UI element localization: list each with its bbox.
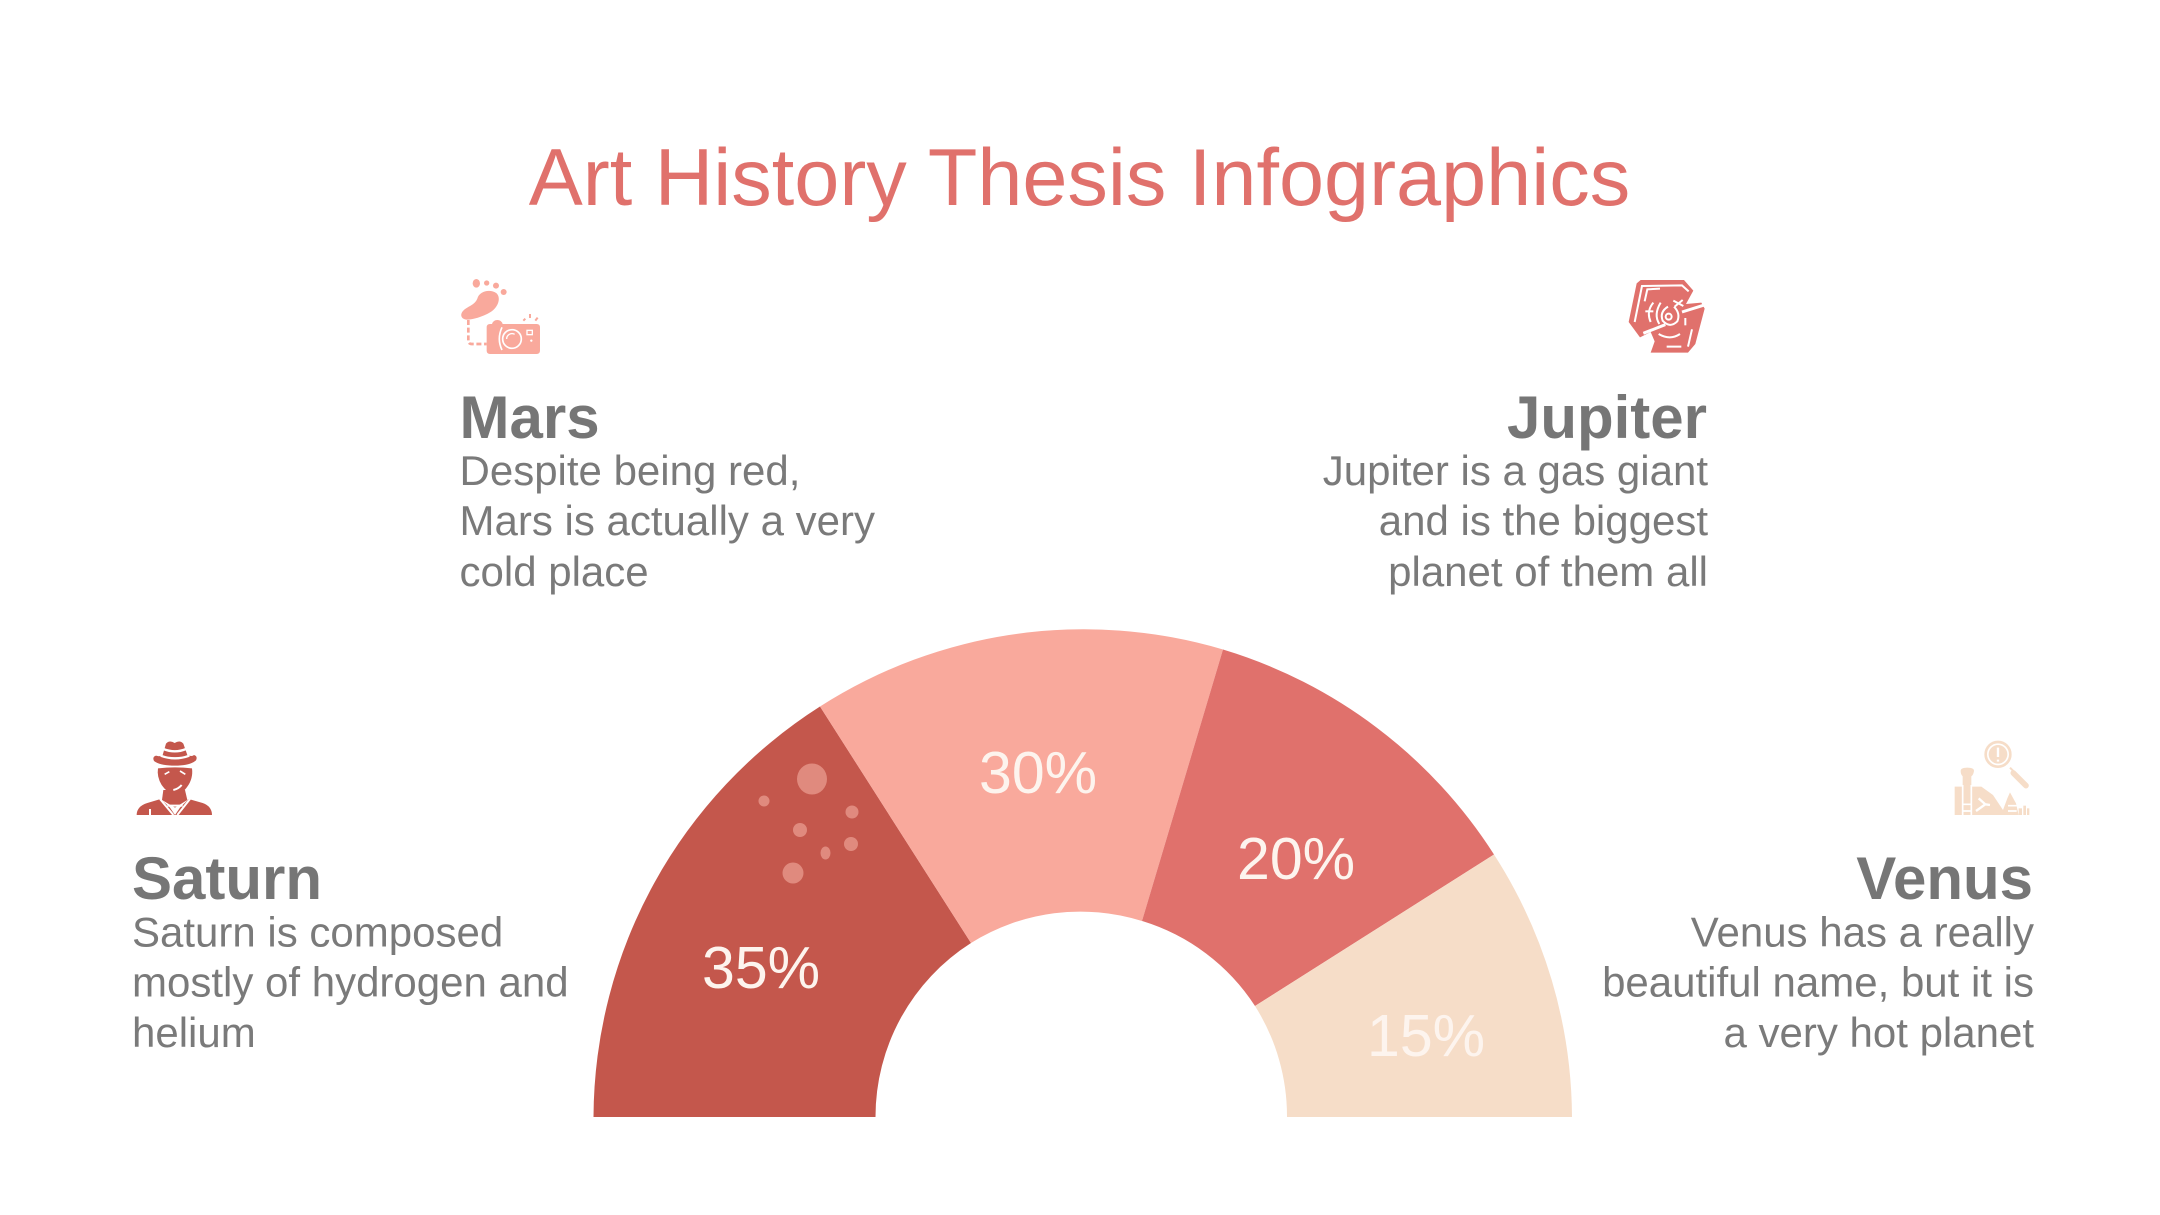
icon: magnifier and ruins	[1955, 742, 2029, 815]
text: Jupiter description: Jupiter is a gas giant	[1323, 447, 1708, 494]
segment: Venus 15%	[1255, 854, 1572, 1117]
text: Venus description: Venus has a really	[1691, 908, 2034, 956]
value: 35%: 35%	[702, 935, 820, 1001]
text: Mars description: Mars is actually a very	[460, 497, 875, 544]
segment: Jupiter 20%	[1142, 650, 1494, 1006]
heading: Venus: Venus	[1856, 845, 2033, 912]
decorative dots on Saturn segment	[758, 764, 858, 884]
icon: explorer with hat	[137, 741, 212, 815]
text: Mars description: Despite being red,	[460, 447, 800, 494]
heading: Mars: Mars	[460, 384, 600, 451]
segment: Saturn 35%	[594, 706, 971, 1117]
heading: Saturn: Saturn	[132, 845, 322, 912]
icon: footprint and camera	[461, 279, 540, 354]
text: Venus description: beautiful name, but it is	[1602, 958, 2034, 1006]
text: Saturn description: helium	[132, 1009, 256, 1056]
icon: map with target	[1629, 280, 1705, 353]
value: 15%: 15%	[1367, 1003, 1485, 1069]
title: Art History Thesis Infographics	[529, 133, 1630, 223]
text: Saturn description: Saturn is composed	[132, 908, 503, 956]
text: Mars description: cold place	[460, 548, 649, 595]
value: 20%: 20%	[1237, 826, 1355, 892]
text: Jupiter description: planet of them all	[1388, 548, 1708, 595]
text: Saturn description: mostly of hydrogen and	[132, 958, 569, 1006]
value: 30%: 30%	[979, 740, 1097, 806]
semicircle chart	[594, 629, 1572, 1117]
text: Venus description: a very hot planet	[1723, 1009, 2034, 1056]
segment: Mars 30%	[820, 629, 1223, 943]
heading: Jupiter: Jupiter	[1507, 384, 1707, 451]
text: Jupiter description: and is the biggest	[1379, 497, 1708, 544]
